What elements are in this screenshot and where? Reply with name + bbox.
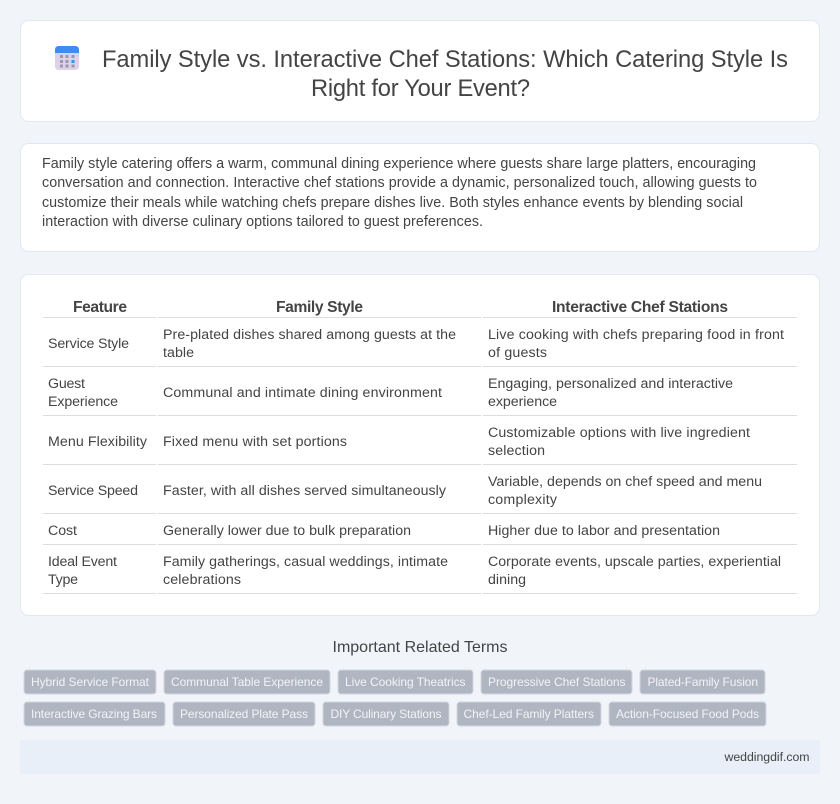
- related term tags: [24, 670, 766, 726]
- row: service style: Pre-plated dishes shared among guests at the: [163, 327, 456, 343]
- row: cost: Higher due to labor and presentation: [488, 523, 720, 539]
- intro text: customize their meals while watching chefs prepare dishes live. Both styles enhance events by blending social: [42, 195, 743, 211]
- intro text: Family style catering offers a warm, communal dining experience where guests share large platters, encouraging: [42, 156, 756, 172]
- row: guest experience: Engaging, personalized and interactive: [488, 376, 733, 392]
- row: service style: Live cooking with chefs preparing food in front: [488, 327, 784, 343]
- related term tags: DIY Culinary Stations: [330, 707, 442, 721]
- row: ideal event type: Family gatherings, casual weddings, intimate: [163, 554, 448, 570]
- related term tags: Chef-Led Family Platters: [464, 707, 594, 721]
- row: menu flexibility: selection: [488, 443, 545, 459]
- row: guest experience: Communal and intimate dining environment: [163, 385, 442, 401]
- intro text: [42, 156, 757, 230]
- panel: introduction: [20, 144, 820, 252]
- row: guest experience: [48, 376, 733, 410]
- title: Family Style vs. Interactive Chef Stations: Which Catering Style Is: [102, 47, 788, 73]
- title: Right for Your Event?: [311, 76, 530, 102]
- intro text: conversation and connection. Interactive chef stations provide a dynamic, personalized touch, allowing guests to: [42, 175, 757, 191]
- related term tags: Hybrid Service Format: [31, 675, 150, 689]
- row: menu flexibility: [48, 425, 750, 459]
- table header: [73, 299, 728, 316]
- row: cost: Cost: [48, 523, 77, 539]
- table header: Interactive Chef Stations: [552, 299, 728, 316]
- row: service style: of guests: [488, 345, 547, 361]
- row: cost: Generally lower due to bulk preparation: [163, 523, 411, 539]
- intro text: interaction with diverse culinary options tailored to guest preferences.: [42, 214, 483, 230]
- related term tags: Communal Table Experience: [171, 675, 323, 689]
- row: service speed: Variable, depends on chef speed and menu: [488, 474, 762, 490]
- related term tags: Progressive Chef Stations: [488, 675, 626, 689]
- row: ideal event type: celebrations: [163, 572, 241, 588]
- related term tags: Personalized Plate Pass: [180, 707, 308, 721]
- row: ideal event type: dining: [488, 572, 526, 588]
- row: cost: [48, 523, 720, 539]
- related term tags: Action-Focused Food Pods: [616, 707, 759, 721]
- row: service speed: Service Speed: [48, 483, 138, 499]
- table header: Feature: [73, 299, 127, 316]
- related term tags: Live Cooking Theatrics: [345, 675, 466, 689]
- icon: calendar: [55, 46, 79, 70]
- row: ideal event type: Type: [48, 572, 78, 588]
- heading: important related terms: Important Related Terms: [332, 639, 508, 656]
- row: ideal event type: Corporate events, upscale parties, experiential: [488, 554, 781, 570]
- row: service speed: [48, 474, 762, 508]
- panel: comparison table: [20, 274, 820, 616]
- table header: Family Style: [276, 299, 363, 316]
- row: menu flexibility: Fixed menu with set portions: [163, 434, 347, 450]
- row: ideal event type: [48, 554, 781, 588]
- footer source text: weddingdif.com: [724, 750, 810, 764]
- row: menu flexibility: Customizable options with live ingredient: [488, 425, 750, 441]
- title: [102, 47, 788, 102]
- related term tags: Interactive Grazing Bars: [31, 707, 157, 721]
- panel: header: [20, 20, 820, 122]
- row: service speed: complexity: [488, 492, 558, 508]
- row: menu flexibility: Menu Flexibility: [48, 434, 148, 450]
- row: service style: [48, 327, 784, 361]
- row: guest experience: Experience: [48, 394, 118, 410]
- footer: [20, 740, 820, 774]
- related term tags: Plated-Family Fusion: [648, 675, 758, 689]
- row: ideal event type: Ideal Event: [48, 554, 117, 570]
- row: service style: Service Style: [48, 336, 129, 352]
- row: service speed: Faster, with all dishes served simultaneously: [163, 483, 447, 499]
- row: guest experience: experience: [488, 394, 557, 410]
- row: guest experience: Guest: [48, 376, 85, 392]
- row: service style: table: [163, 345, 194, 361]
